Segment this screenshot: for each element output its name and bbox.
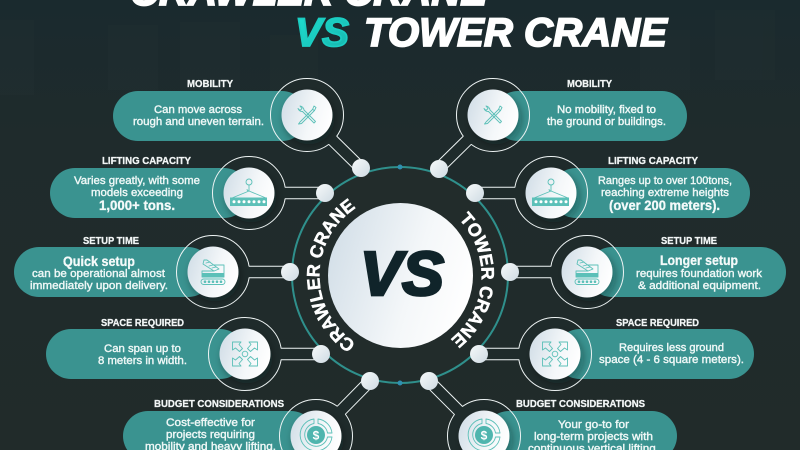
text	[636, 252, 763, 292]
text	[528, 419, 659, 450]
heading: MOBILITY	[567, 78, 612, 90]
heading: BUDGET CONSIDERATIONS	[516, 398, 645, 410]
panel: tower mobility	[430, 78, 687, 178]
text: Your go-to for	[558, 419, 629, 431]
text	[30, 253, 168, 292]
vs text: VS	[360, 240, 444, 309]
text: & additional equipment.	[638, 280, 761, 292]
icon: tools	[298, 106, 316, 124]
icon: dollar coin	[300, 419, 332, 450]
text	[145, 417, 276, 450]
heading: SPACE REQUIRED	[616, 317, 699, 329]
panel: crawler space required	[46, 317, 330, 390]
panel: tower budget considerations	[420, 372, 677, 450]
heading: LIFTING CAPACITY	[608, 155, 698, 167]
text: projects requiring	[166, 429, 255, 441]
icon: tools	[484, 106, 502, 124]
title	[130, 0, 668, 55]
text: No mobility, fixed to	[557, 104, 656, 116]
text: reaching extreme heights	[601, 187, 730, 199]
text: Quick setup	[63, 253, 135, 269]
text: Can span up to	[104, 343, 181, 355]
text: requires foundation work	[636, 268, 763, 280]
panel: crawler budget considerations	[123, 372, 379, 450]
panel: crawler lifting capacity	[50, 155, 334, 230]
text: Requires less ground	[619, 342, 724, 354]
heading: BUDGET CONSIDERATIONS	[154, 398, 284, 410]
text: (over 200 meters).	[609, 197, 720, 213]
vs disc	[328, 203, 473, 348]
text: space (4 - 6 square meters).	[599, 354, 744, 366]
crawler crane curved label: CRAWLER CRANE	[306, 198, 356, 351]
ring bead top	[398, 164, 402, 170]
panel: crawler setup time	[14, 235, 299, 308]
text: 8 meters in width.	[98, 355, 187, 367]
text: Can move across	[154, 104, 243, 116]
panel: tower setup time	[501, 235, 786, 308]
center hub	[291, 164, 509, 386]
heading: SPACE REQUIRED	[101, 317, 184, 329]
text: can be operational almost	[32, 268, 165, 280]
icon: expand arrows	[542, 342, 568, 366]
icon: dollar coin	[468, 419, 500, 450]
panel: tower space required	[470, 317, 754, 390]
icon: crawler crane	[575, 260, 599, 284]
ring bead bottom	[398, 380, 402, 386]
text: immediately upon delivery.	[30, 280, 168, 292]
icon: crawler crane	[201, 260, 225, 284]
text: Cost-effective for	[166, 417, 255, 429]
text: the ground or buildings.	[547, 116, 666, 128]
text	[98, 343, 187, 367]
title: VS	[295, 11, 349, 55]
text	[133, 104, 264, 128]
icon: crane load	[532, 179, 569, 206]
text	[598, 175, 732, 213]
heading: LIFTING CAPACITY	[102, 155, 191, 167]
text: 1,000+ tons.	[99, 197, 175, 213]
heading: SETUP TIME	[661, 235, 717, 247]
text: Longer setup	[660, 252, 738, 268]
text	[74, 175, 200, 213]
icon: expand arrows	[232, 342, 258, 366]
panel: crawler mobility	[113, 78, 370, 177]
text: Varies greatly, with some	[74, 175, 200, 187]
heading: MOBILITY	[187, 78, 233, 90]
text: Ranges up to over 100tons,	[598, 175, 732, 187]
text	[599, 342, 744, 366]
heading: SETUP TIME	[83, 235, 139, 247]
text: long-term projects with	[534, 431, 653, 443]
panel: tower lifting capacity	[466, 155, 750, 230]
icon: crane load	[230, 179, 267, 206]
title: TOWER CRANE	[364, 11, 668, 55]
text: models exceeding	[91, 187, 183, 199]
text: rough and uneven terrain.	[133, 116, 264, 128]
tower crane curved label: TOWER CRANE	[450, 210, 494, 348]
text	[547, 104, 666, 128]
